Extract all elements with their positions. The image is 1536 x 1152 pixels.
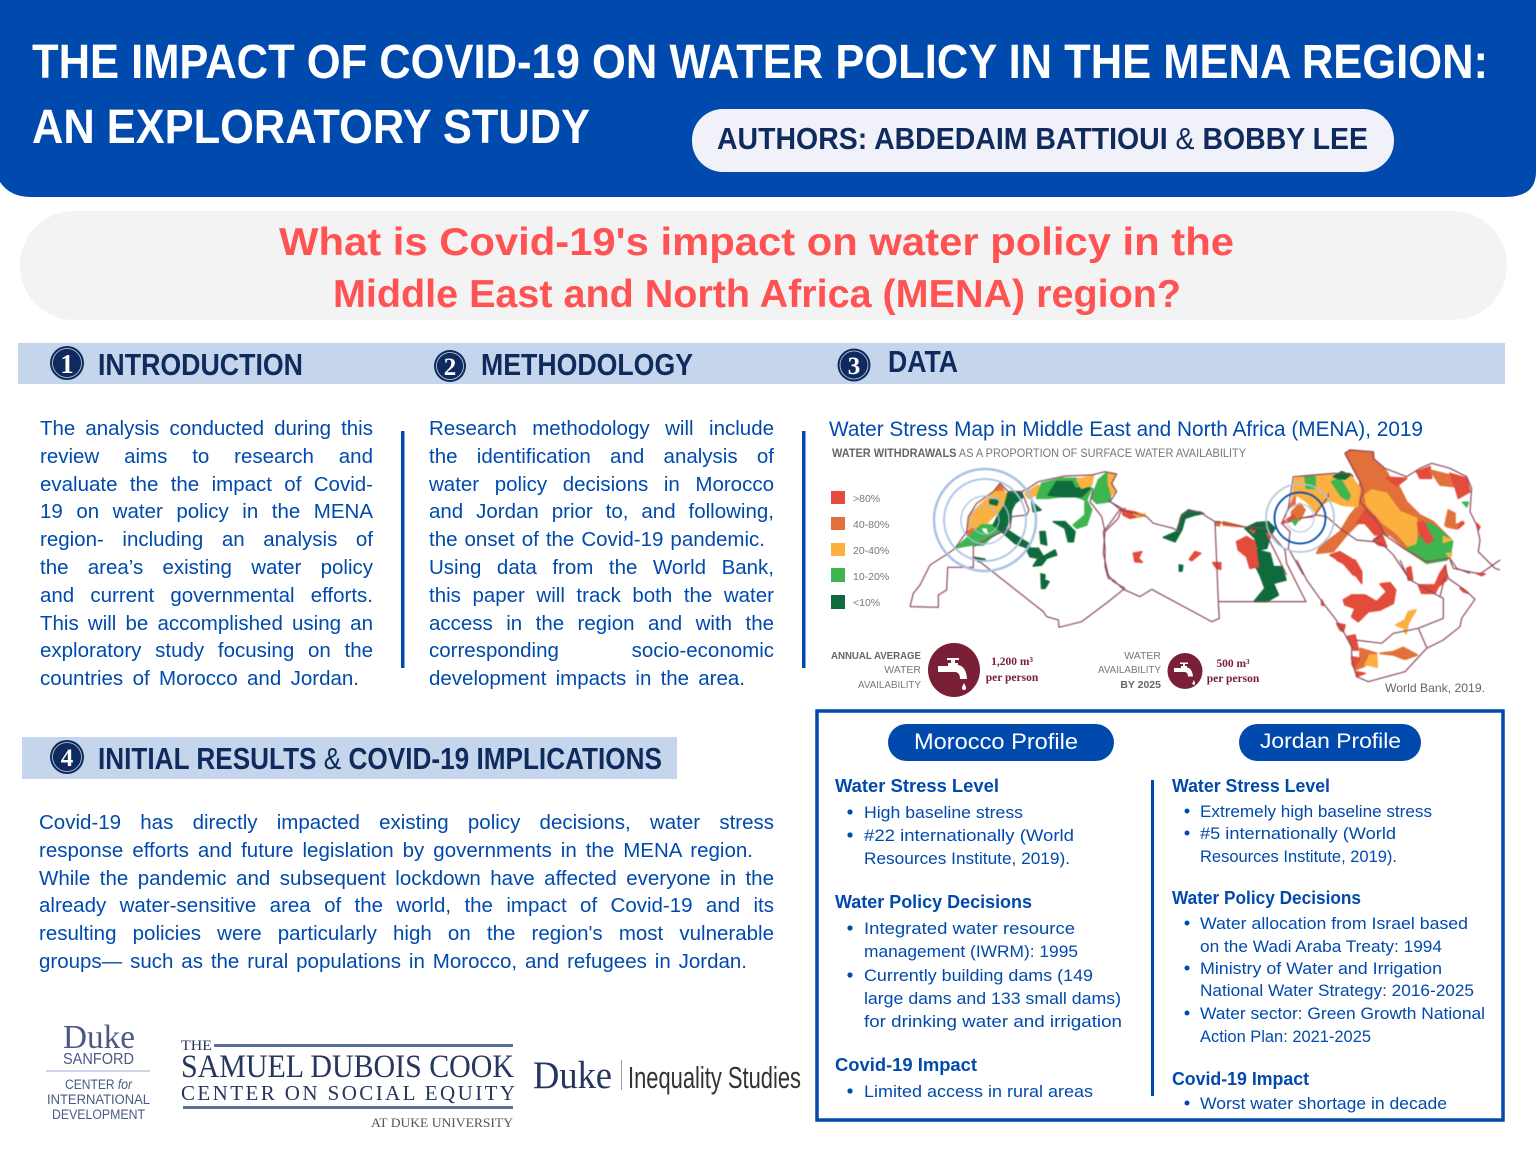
stat: water availability by 2025: 500 m³ [1216,658,1250,670]
logo: Samuel DuBois Cook Center: CENTER ON SOCIAL EQUITY [181,1081,515,1105]
text block: initial results: Covid-19 has directly impacted existing policy decisions, water stress [39,811,774,834]
Jordan water policy decisions [1172,888,1485,1046]
icon: number 3 [838,348,870,382]
Morocco pill [888,724,1114,761]
Morocco water stress level: #22 internationally (World [864,826,1074,845]
map title: Water Stress Map in Middle East and North Africa (MENA), 2019 [829,418,1423,441]
Morocco water stress level: Water Stress Level [835,776,999,796]
Jordan covid impact: Covid-19 Impact [1172,1069,1309,1089]
Morocco covid impact: Limited access in rural areas [864,1082,1093,1101]
text block: introduction: 19 on water policy in the MENA [40,500,373,523]
Jordan water stress level: Resources Institute, 2019). [1200,847,1397,866]
icon: faucet [928,643,980,697]
logo: Samuel DuBois Cook Center: THE [181,1038,212,1054]
map legend: <10% [853,597,880,609]
logo: Duke Sanford: Duke [63,1019,135,1056]
icon: number 3: 3 [848,353,860,380]
heading: initial results: INITIAL RESULTS & COVID-19 IMPLICATIONS [98,741,662,776]
Morocco water policy decisions: Currently building dams (149 [864,966,1093,985]
text block: methodology: this paper will track both the water [429,584,774,607]
map subtitle: WATER WITHDRAWALS AS A PROPORTION OF SURFACE WATER AVAILABILITY [832,446,1246,460]
logo: Duke Sanford [46,1019,150,1122]
icon: faucet small [1168,653,1202,689]
Jordan covid impact: Worst water shortage in decade [1200,1094,1447,1113]
map legend: >80% [853,493,880,505]
icon: number 4: 4 [61,745,74,772]
text block: initial results: While the pandemic and subsequent lockdown have affected everyone in the [39,867,774,890]
text block: introduction: evaluate the the impact of Covid- [40,473,373,496]
text block: methodology: the onset of the Covid-19 pandemic. [429,528,765,551]
stat: water availability by 2025 [1098,650,1260,691]
Jordan water policy decisions: National Water Strategy: 2016-2025 [1200,981,1474,1000]
pressure rings: Jordan [1266,484,1334,552]
stat: annual average water availability: per person [986,672,1039,684]
map legend [831,491,889,609]
Jordan pill: Jordan Profile [1260,730,1401,753]
map legend: 20-40% [853,545,889,557]
text block: introduction [40,417,373,690]
water stress map [910,450,1500,682]
text block: initial results: response efforts and future legislation by governments in the MENA region. [39,839,753,862]
text block: introduction: the area’s existing water policy [40,556,373,579]
Middle East region [1267,450,1500,575]
Morocco water policy decisions [835,892,1122,1031]
authors pill [692,109,1394,172]
text block: methodology: Using data from the World Bank, [429,556,774,579]
text block: methodology: development impacts in the area. [429,667,745,690]
title [32,36,1488,154]
Morocco covid impact: Covid-19 Impact [835,1055,977,1075]
icon: number 2: 2 [444,354,456,381]
text block: initial results: groups— such as the rural populations in Morocco, and refugees in Jordan. [39,950,747,973]
stat: annual average water availability: 1,200 m³ [991,656,1033,668]
text block: introduction: review aims to research and [40,445,373,468]
text block: methodology: Research methodology will include [429,417,774,440]
header banner [0,0,1536,197]
logo: Samuel DuBois Cook Center: AT DUKE UNIVERSITY [371,1116,513,1130]
logo: Duke Sanford: INTERNATIONAL [47,1092,150,1107]
section band: initial results [22,737,677,779]
authors pill: AUTHORS: ABDEDAIM BATTIOUI & BOBBY LEE [717,121,1368,156]
column divider left [401,431,404,668]
text block: methodology: water policy decisions in Morocco [429,473,774,496]
Jordan water stress level: Extremely high baseline stress [1200,802,1432,821]
logo: Duke Sanford: CENTER for [65,1077,132,1092]
Jordan water policy decisions: Water sector: Green Growth National [1200,1004,1485,1023]
text block: methodology [429,417,774,690]
map source: World Bank, 2019. [1385,681,1485,695]
Libya and Egypt region [1103,500,1306,622]
Jordan water stress level [1172,776,1432,866]
text block: methodology: and Jordan prior to, and following, [429,500,774,523]
Jordan pill [1239,724,1421,761]
profile divider [1151,780,1154,1096]
pressure rings: Morocco [934,469,1036,571]
logo: Duke Sanford: DEVELOPMENT [52,1107,145,1122]
Maghreb region [910,472,1125,627]
research question panel [20,211,1507,320]
section band: introduction, methodology, data [18,343,1505,384]
Morocco water stress level: Resources Institute, 2019). [864,849,1070,868]
heading: data: DATA [888,344,958,379]
stat: water availability by 2025: BY 2025 [1120,679,1161,691]
icon: number 1: 1 [60,349,74,379]
stat: annual average water availability [831,643,1039,697]
stat: water availability by 2025: AVAILABILITY [1098,664,1161,676]
stat: annual average water availability: ANNUAL AVERAGE [831,650,921,662]
text block: introduction: region- including an analysis of [40,528,373,551]
Morocco water stress level: High baseline stress [864,803,1023,822]
heading: methodology: METHODOLOGY [481,347,693,382]
logo: Duke Inequality Studies: Duke [533,1054,612,1097]
text block: introduction: The analysis conducted during this [40,417,373,440]
logo: Duke Inequality Studies: Inequality Studies [628,1060,801,1095]
Jordan water policy decisions: on the Wadi Araba Treaty: 1994 [1200,937,1442,956]
Morocco water policy decisions: large dams and 133 small dams) [864,989,1121,1008]
Morocco water policy decisions: Water Policy Decisions [835,892,1032,912]
text block: initial results: resulting policies were particularly high on the region's most vulnerable [39,922,774,945]
stat: water availability by 2025: WATER [1124,650,1161,662]
icon: number 1 [50,346,84,380]
Jordan water policy decisions: Water allocation from Israel based [1200,914,1468,933]
stat: annual average water availability: AVAILABILITY [858,679,921,691]
country profiles panel [817,711,1503,1120]
Jordan covid impact [1172,1069,1447,1113]
Morocco water stress level [835,776,1074,868]
stat: water availability by 2025: per person [1207,673,1260,685]
research question panel: Middle East and North Africa (MENA) region? [333,273,1181,316]
text block: introduction: countries of Morocco and Jordan. [40,667,359,690]
map legend: 10-20% [853,571,889,583]
text block: methodology: access in the region and with the [429,612,774,635]
logo: Samuel DuBois Cook Center: SAMUEL DUBOIS COOK [181,1049,514,1085]
research question panel: What is Covid-19's impact on water policy in the [279,221,1234,264]
Jordan water policy decisions: Ministry of Water and Irrigation [1200,959,1442,978]
heading: introduction: INTRODUCTION [98,347,303,382]
text block: introduction: This will be accomplished using an [40,612,373,635]
text block: introduction: exploratory study focusing on the [40,639,373,662]
Jordan water stress level: Water Stress Level [1172,776,1330,796]
map legend: 40-80% [853,519,889,531]
icon: number 4 [50,740,84,774]
text block: introduction: and current governmental efforts. [40,584,373,607]
Morocco water policy decisions: management (IWRM): 1995 [864,942,1078,961]
Morocco pill: Morocco Profile [914,729,1078,754]
icon: number 2 [434,350,466,382]
logo: Duke Inequality Studies [533,1054,801,1097]
Jordan water stress level: #5 internationally (World [1200,824,1396,843]
column divider right [802,431,806,668]
Jordan water policy decisions: Action Plan: 2021-2025 [1200,1027,1371,1046]
Morocco profile [835,724,1122,1101]
text block: initial results: already water-sensitive area of the world, the impact of Covid-19 and its [39,894,774,917]
stat: annual average water availability: WATER [884,664,921,676]
logo: Duke Sanford: SANFORD [63,1051,134,1068]
title: AN EXPLORATORY STUDY [32,101,590,154]
Morocco water policy decisions: for drinking water and irrigation [864,1012,1122,1031]
text block: initial results [39,811,774,973]
logo: Samuel DuBois Cook Center [181,1038,515,1130]
text block: methodology: corresponding socio-economic [429,639,774,662]
Jordan profile [1172,724,1485,1113]
text block: methodology: the identification and analysis of [429,445,774,468]
Arabian peninsula region [1297,560,1500,682]
Jordan water policy decisions: Water Policy Decisions [1172,888,1361,908]
Morocco water policy decisions: Integrated water resource [864,919,1075,938]
Morocco covid impact [835,1055,1093,1101]
